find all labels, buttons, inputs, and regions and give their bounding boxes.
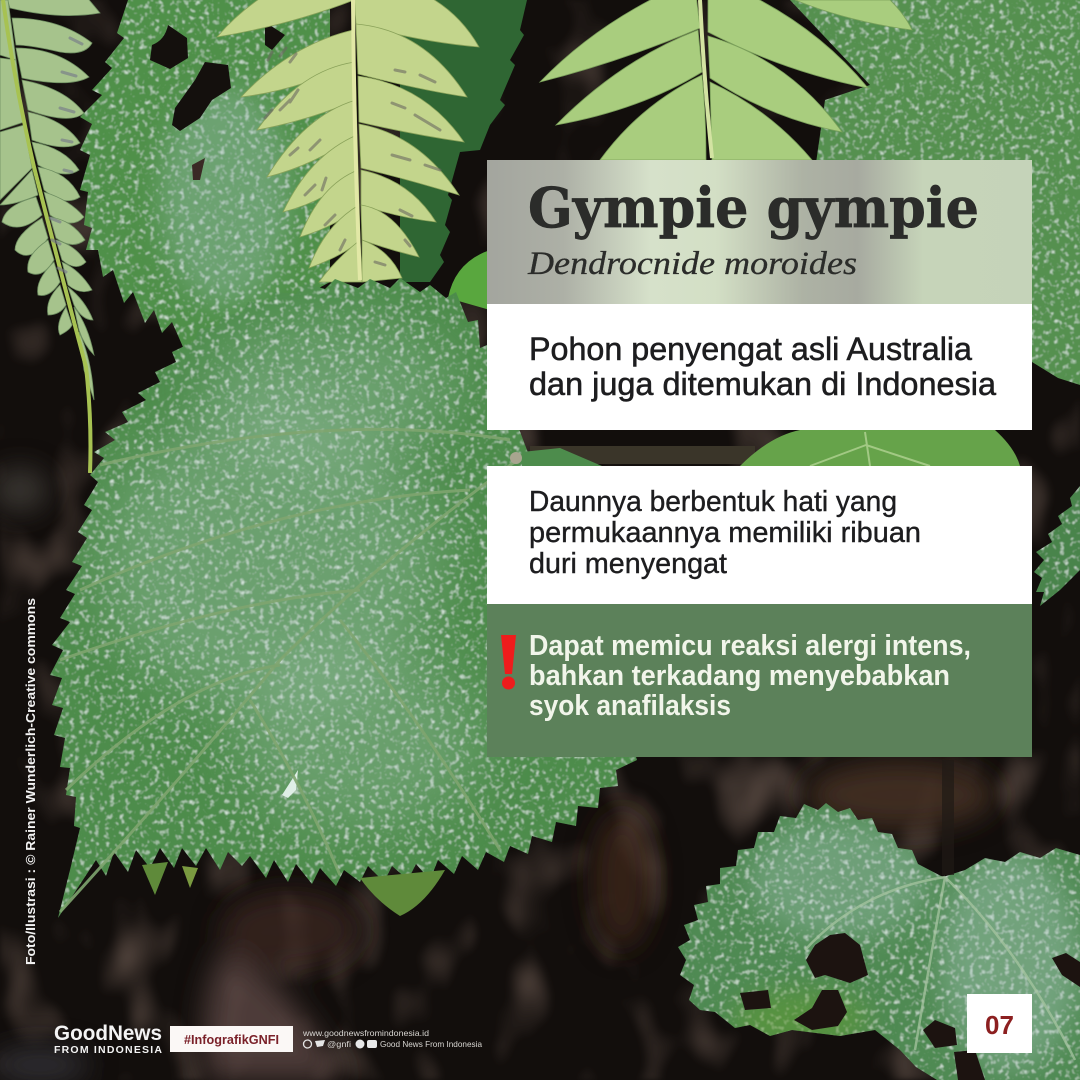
leaf under main leaf	[360, 870, 445, 916]
fern: far left	[0, 0, 100, 473]
top-right large leaf	[790, 0, 1080, 385]
small leaf behind title panel	[448, 250, 490, 310]
bottom right leaf	[678, 803, 1080, 1080]
photo credit: Foto/Ilustrasi : © Rainer Wunderlich-Creative commons	[24, 598, 38, 965]
social media links: @gnfi	[327, 1039, 351, 1049]
icon: exclamation mark	[501, 635, 516, 690]
social media links	[302, 1028, 482, 1049]
panel: leaf description	[487, 466, 1032, 604]
top-left leaf holes	[150, 22, 285, 180]
panel: warning: bahkan terkadang menyebabkan	[529, 660, 950, 692]
leaf stem joint	[510, 452, 522, 464]
fern: top right	[540, 0, 912, 160]
fern: top centre	[217, 0, 479, 282]
main leaf veins	[60, 429, 520, 912]
dark serrated leaf behind fern	[400, 0, 527, 282]
stem behind panels	[530, 446, 755, 464]
panel: warning: Dapat memicu reaksi alergi intens,	[529, 630, 971, 662]
social media links: www.goodnewsfromindonesia.id	[302, 1028, 429, 1038]
panel: origin	[487, 304, 1032, 430]
right leaf fragment	[1034, 486, 1080, 606]
logo: GoodNews: GoodNews	[54, 1022, 162, 1045]
pale patch on top-left leaf	[160, 85, 290, 305]
panel: origin: dan juga ditemukan di Indonesia	[529, 366, 996, 402]
logo: GoodNews: FROM INDONESIA	[54, 1044, 162, 1056]
main heart-shaped leaf	[50, 278, 637, 918]
bottom right leaf shading	[730, 820, 1080, 1070]
hashtag badge	[170, 1026, 293, 1052]
hashtag badge: #InfografikGNFI	[184, 1033, 279, 1047]
panel: warning	[487, 604, 1032, 757]
logo: GoodNews	[54, 1022, 162, 1056]
social media links: Good News From Indonesia	[380, 1039, 482, 1049]
pale dew patches on main leaf	[100, 320, 480, 830]
bottom right leaf veins and holes	[740, 760, 1080, 1080]
panel: origin: Pohon penyengat asli Australia	[529, 331, 972, 367]
scientific name: Dendrocnide moroides	[527, 246, 857, 282]
page number	[967, 994, 1032, 1053]
leaf fragment between panels	[522, 448, 602, 466]
small leaf between panels	[740, 430, 1020, 466]
top-left large leaf	[80, 0, 330, 352]
heading: Gympie gympie	[528, 175, 979, 240]
panel: leaf description: permukaannya memiliki ribuan	[529, 517, 921, 549]
panel: title	[487, 160, 1032, 304]
page number: 07	[985, 1010, 1014, 1040]
panel: warning: syok anafilaksis	[529, 690, 731, 722]
panel: leaf description: duri menyengat	[529, 548, 727, 580]
panel: leaf description: Daunnya berbentuk hati yang	[529, 486, 897, 518]
